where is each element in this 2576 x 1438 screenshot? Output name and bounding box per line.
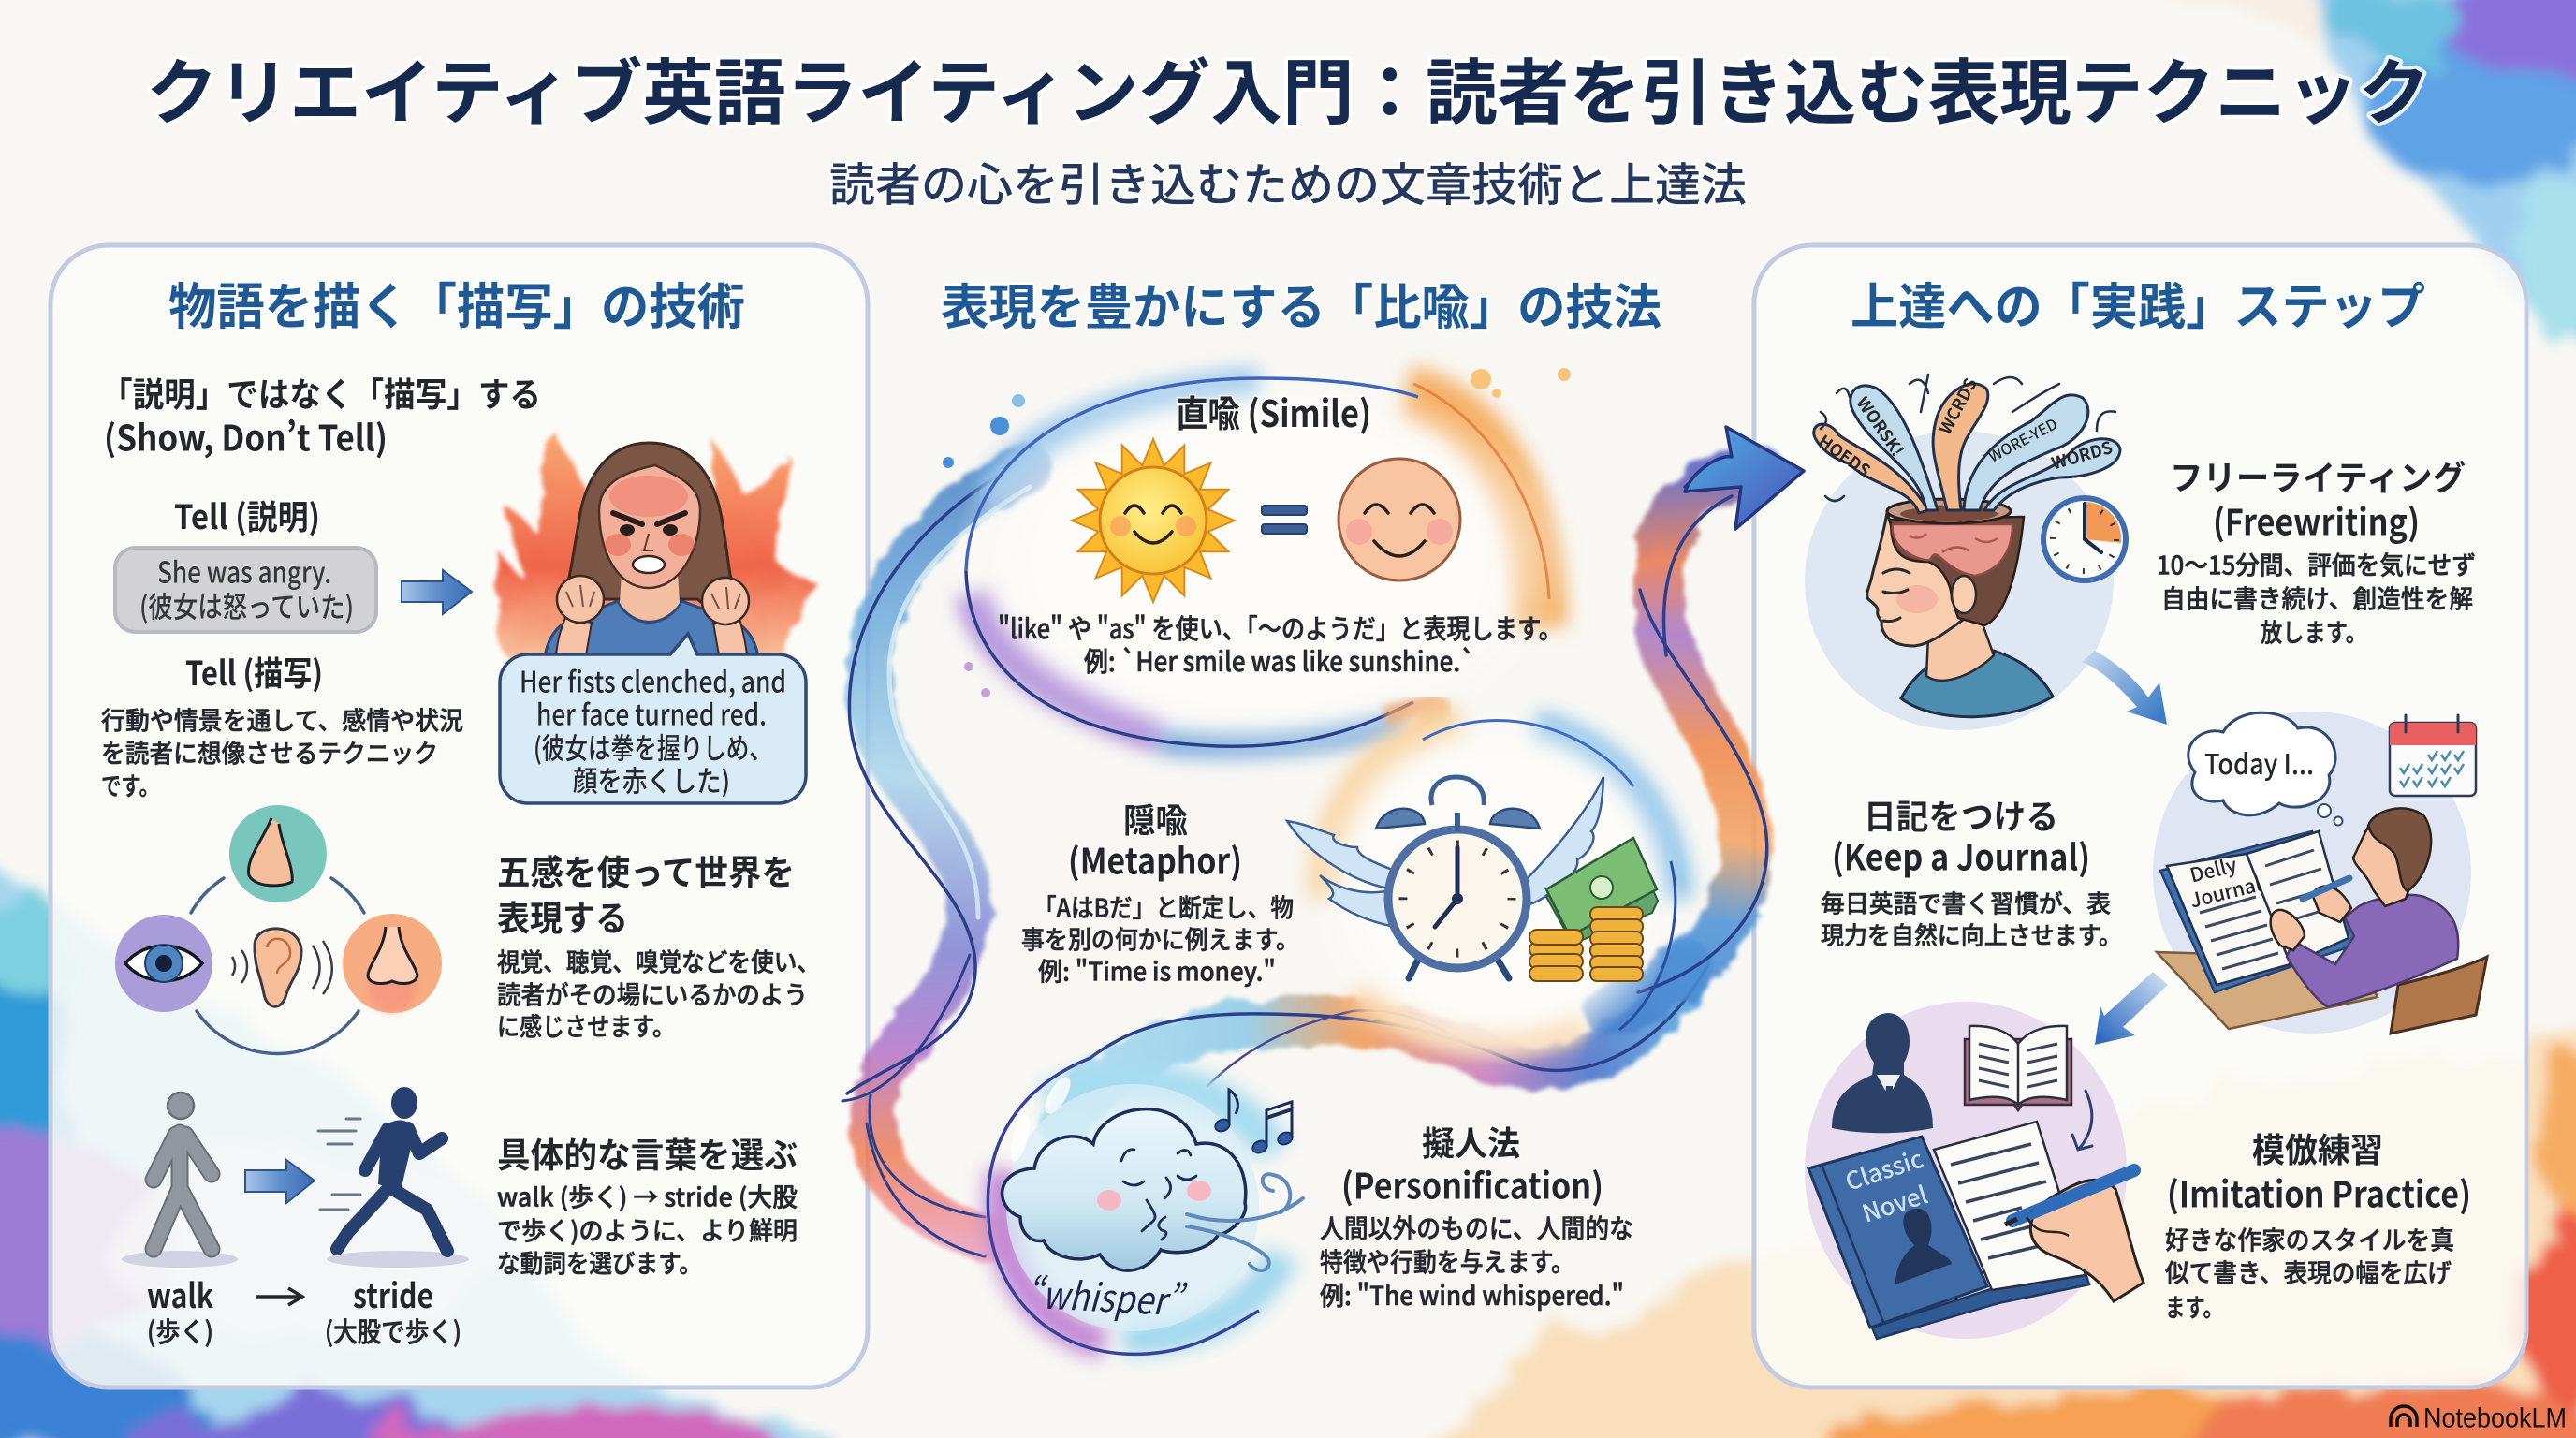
freewriting heading: (Freewriting) xyxy=(2213,494,2420,545)
label: metaphor: 隠喩 xyxy=(1123,794,1188,843)
simile explanation xyxy=(998,608,1562,680)
arrow: reading to writing xyxy=(2072,1091,2092,1150)
label: show: Tell (描写) xyxy=(185,647,323,696)
personification explanation: 特徴や行動を与えます。 xyxy=(1320,1242,1574,1280)
icon: winged alarm clock xyxy=(1287,777,1603,978)
show don't tell heading: (Show, Don’t Tell) xyxy=(104,410,388,461)
imitation heading xyxy=(2167,1123,2471,1217)
journal heading: (Keep a Journal) xyxy=(1832,829,2090,880)
show explanation: です。 xyxy=(101,766,159,803)
speech bubble: show example: 顔を赤くした) xyxy=(573,758,730,800)
ribbon: left flowing xyxy=(842,468,1030,1256)
panel: left card background xyxy=(51,245,868,1387)
label: personification: 擬人法 xyxy=(1422,1117,1520,1166)
panel: right card background xyxy=(1754,245,2526,1387)
illustration: head with flowing words: WORSK! xyxy=(1852,391,1910,461)
ribbon: bottom flowing xyxy=(1062,964,1708,1123)
journal explanation: 現力を自然に向上させます。 xyxy=(1821,917,2122,951)
speech bubble: show example: her face turned red. xyxy=(536,691,767,734)
journal explanation: 毎日英語で書く習慣が、表 xyxy=(1821,886,2111,919)
senses ring xyxy=(191,878,364,1053)
concrete words explanation: な動詞を選びます。 xyxy=(497,1243,702,1281)
tell grey box: (彼女は怒っていた) xyxy=(139,584,354,625)
icon: money and coins xyxy=(1530,838,1658,981)
illustration: angry woman in flames xyxy=(496,431,816,657)
metaphor explanation: 例: "Time is money." xyxy=(1038,951,1276,989)
senses explanation: 読者がその場にいるかのよう xyxy=(497,976,808,1011)
icon: equals sign xyxy=(1262,506,1307,534)
illustration: person writing in journal: Delly xyxy=(2187,850,2240,889)
icon: wind swirls xyxy=(1187,1174,1303,1270)
speech bubble: show example xyxy=(500,634,806,803)
thought bubble: Today I... xyxy=(2204,741,2314,783)
senses heading xyxy=(497,844,795,941)
watercolor wash: bottom right xyxy=(1404,1030,2576,1438)
journal heading xyxy=(1832,790,2090,880)
tell grey box: She was angry. xyxy=(157,549,331,592)
panel heading: practice: 上達への「実践」ステップ xyxy=(1851,268,2425,339)
freewriting explanation: 10〜15分間、評価を気にせず xyxy=(2157,545,2476,582)
icon: author silhouette xyxy=(1832,1013,1933,1133)
tell grey box xyxy=(115,548,376,632)
illustration: head with flowing words: HOEDS xyxy=(1814,429,1876,482)
icon: smiling face xyxy=(1339,459,1460,580)
ribbon: right flowing arrow xyxy=(1610,427,1804,1011)
label: simile: 直喩 (Simile) xyxy=(1176,386,1371,438)
freewriting explanation: 放します。 xyxy=(2261,612,2367,650)
icon: striding figure xyxy=(318,1087,469,1268)
icon: music notes xyxy=(1213,1090,1295,1155)
label: stride: (大股で歩く) xyxy=(325,1311,461,1350)
senses heading: 表現する xyxy=(497,890,628,941)
left panel contents xyxy=(101,368,820,1350)
imitation explanation: 好きな作家のスタイルを真 xyxy=(2165,1221,2454,1256)
personification explanation xyxy=(1320,1209,1633,1313)
imitation explanation: 似て書き、表現の幅を広げ xyxy=(2165,1253,2452,1290)
icon: walking figure xyxy=(122,1093,238,1268)
speech bubble: show example: Her fists clenched, and xyxy=(520,659,786,700)
illustration backdrop: imitation xyxy=(1805,1002,2127,1339)
label: stride xyxy=(325,1269,461,1350)
concrete words explanation: walk (歩く) → stride (大股 xyxy=(497,1178,798,1213)
personification explanation: 人間以外のものに、人間的な xyxy=(1320,1209,1633,1246)
label: personification: (Personification) xyxy=(1341,1157,1603,1210)
freewriting heading: フリーライティング xyxy=(2170,451,2466,500)
metaphor explanation: 事を別の何かに例えます。 xyxy=(1021,919,1299,957)
icon: calendar xyxy=(2390,715,2476,796)
arrow: step two to three xyxy=(2095,972,2168,1045)
imitation heading: (Imitation Practice) xyxy=(2167,1167,2471,1217)
icon: blowing cloud xyxy=(1003,1109,1246,1270)
illustration: person writing in journal: Journal xyxy=(2187,870,2264,915)
show explanation xyxy=(101,700,463,803)
personification explanation: 例: "The wind whispered." xyxy=(1320,1276,1624,1313)
illustration: head with flowing words xyxy=(1805,374,2120,730)
imitation explanation xyxy=(2165,1221,2454,1324)
illustration: classic novel and hand writing: Novel xyxy=(1857,1176,1932,1230)
freewriting explanation xyxy=(2157,545,2476,650)
arrow: walk to stride xyxy=(245,1160,315,1203)
right panel contents xyxy=(1805,374,2487,1339)
label: walk: (歩く) xyxy=(147,1311,213,1350)
icon: nose circle right xyxy=(343,914,442,1013)
whisper label: “whisper” xyxy=(1026,1263,1189,1328)
label: stride: stride xyxy=(353,1269,433,1318)
journal heading: 日記をつける xyxy=(1864,790,2058,839)
show explanation: 行動や情景を通して、感情や状況 xyxy=(101,700,463,738)
arrow: walk word to stride word xyxy=(256,1288,302,1305)
journal explanation xyxy=(1821,886,2122,951)
panel heading: description: 物語を描く「描写」の技術 xyxy=(168,268,745,339)
speech bubble: show example: (彼女は拳を握りしめ、 xyxy=(534,725,772,768)
label: metaphor: (Metaphor) xyxy=(1068,833,1242,884)
illustration: journal writer backdrop xyxy=(2153,712,2471,1034)
bubble: metaphor xyxy=(1310,710,1685,1065)
arrow: step one to two xyxy=(2082,651,2167,725)
title: クリエイティブ英語ライティング入門：読者を引き込む表現テクニック xyxy=(146,36,2430,139)
illustration: classic novel and hand writing xyxy=(1808,1122,2144,1339)
metaphor explanation: 「AはBだ」と断定し、物 xyxy=(1033,888,1294,925)
senses explanation: 視覚、聴覚、嗅覚などを使い、 xyxy=(497,942,820,979)
icon: eye circle xyxy=(115,915,212,1012)
icon: nose top circle xyxy=(229,805,327,902)
center column contents xyxy=(842,365,1804,1354)
freewriting heading xyxy=(2170,451,2466,545)
show don't tell heading xyxy=(101,368,541,461)
bubble: personification xyxy=(988,1058,1282,1354)
label: walk: walk xyxy=(147,1269,213,1318)
panel heading: metaphor: 表現を豊かにする「比喩」の技法 xyxy=(941,268,1661,339)
senses explanation xyxy=(497,942,820,1043)
label: personification xyxy=(1341,1117,1603,1210)
freewriting explanation: 自由に書き続け、創造性を解 xyxy=(2161,579,2473,616)
watercolor wash: bottom left xyxy=(0,843,861,1438)
icon: smiling sun xyxy=(1072,439,1235,602)
illustration: head with flowing words: WCRDS xyxy=(1933,374,1983,438)
illustration: person writing in journal xyxy=(2157,808,2487,1034)
subtitle: 読者の心を引き込むための文章技術と上達法 xyxy=(829,148,1747,215)
imitation explanation: ます。 xyxy=(2165,1288,2223,1324)
illustration: head with flowing words: WORDS xyxy=(2048,434,2115,475)
imitation heading: 模倣練習 xyxy=(2252,1123,2383,1172)
icon: timer clock xyxy=(2043,498,2126,580)
simile explanation: 例: `Her smile was like sunshine.` xyxy=(1084,640,1475,680)
illustration: head with flowing words: WORE-YED xyxy=(1983,412,2061,467)
label: metaphor xyxy=(1068,794,1242,884)
simile explanation: "like" や "as" を使い、「〜のようだ」と表現します。 xyxy=(998,608,1562,647)
icon: ear with sound waves xyxy=(232,929,332,1006)
senses heading: 五感を使って世界を xyxy=(497,844,795,895)
metaphor explanation xyxy=(1021,888,1299,989)
show don't tell heading: 「説明」ではなく「描写」する xyxy=(101,368,541,417)
bubble: simile xyxy=(943,365,1571,758)
concrete words explanation xyxy=(497,1178,798,1281)
watercolor wash: top right xyxy=(2115,0,2576,374)
show explanation: を読者に想像させるテクニック xyxy=(101,734,438,770)
thought bubble xyxy=(2188,712,2342,826)
label: walk xyxy=(147,1269,213,1350)
icon: open book xyxy=(1965,1026,2071,1110)
illustration: classic novel and hand writing: Classic xyxy=(1840,1140,1927,1198)
arrow: tell to show xyxy=(402,570,472,614)
concrete words heading: 具体的な言葉を選ぶ xyxy=(497,1127,798,1178)
concrete words explanation: で歩く)のように、より鮮明 xyxy=(497,1211,798,1247)
tell label: Tell (説明) xyxy=(174,491,320,539)
senses explanation: に感じさせます。 xyxy=(497,1007,675,1043)
